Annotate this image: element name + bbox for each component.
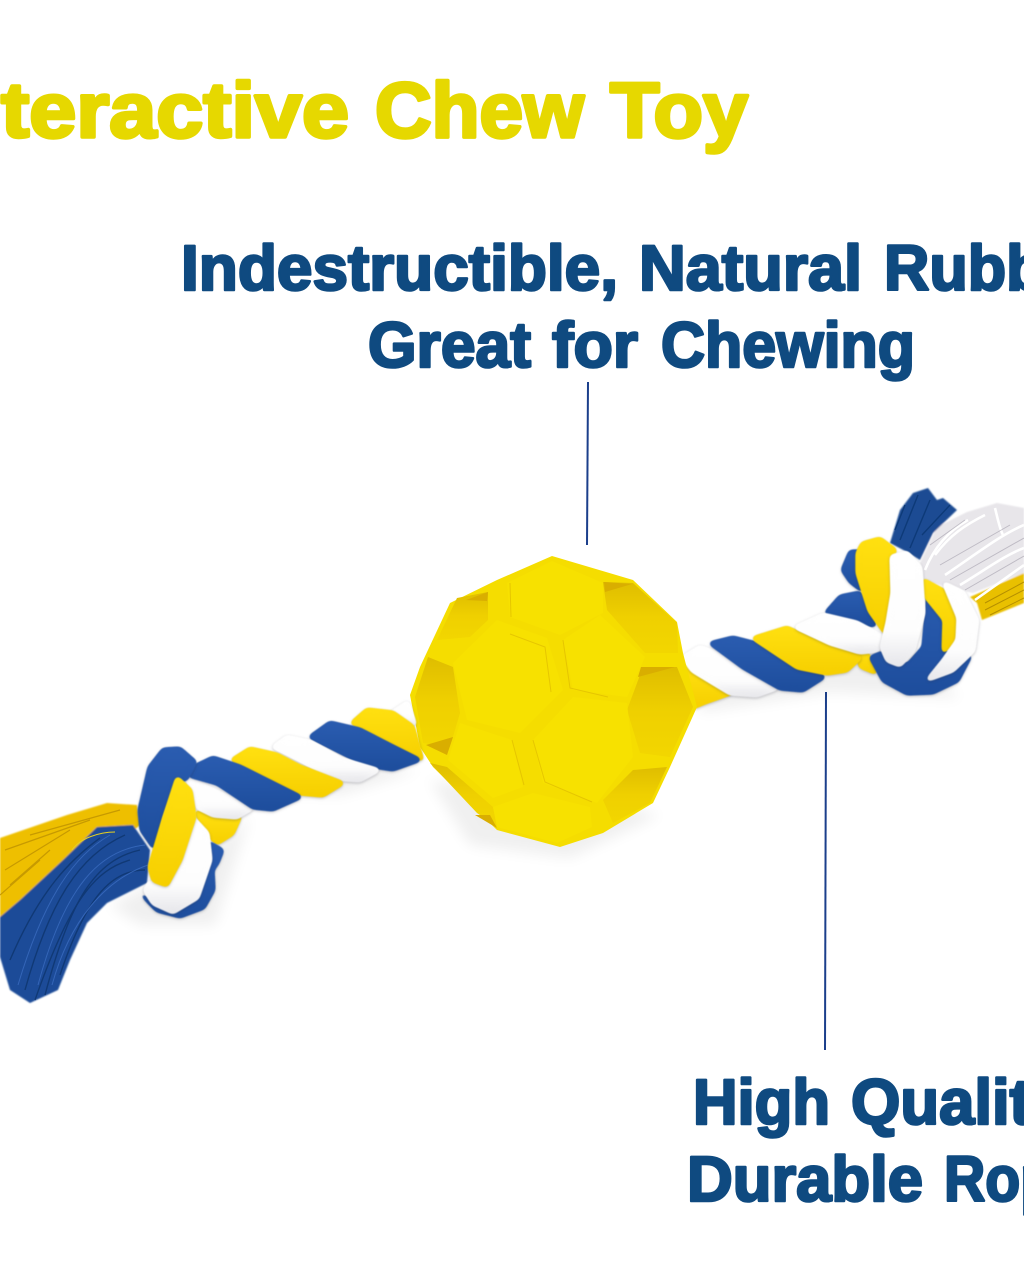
heading: rubber callout: Natural (639, 232, 862, 304)
heading: rubber callout: Indestructible, (181, 232, 618, 304)
product: rope and ball toy (0, 488, 1024, 1003)
rope left: twisted strands (186, 701, 423, 844)
leader line: rubber ball (587, 382, 588, 545)
heading: rope callout: Durable (687, 1143, 923, 1215)
ball body (410, 556, 697, 847)
title: Toy (610, 66, 748, 154)
rope right: twisted strands (682, 592, 885, 708)
rope right: knot (842, 538, 978, 694)
heading: rubber callout: Great (368, 309, 531, 381)
heading: rubber callout: for (552, 309, 638, 381)
heading: rubber callout (181, 232, 1024, 381)
rubber ball (410, 556, 697, 847)
rope left: knot (139, 748, 223, 917)
title: Chew (375, 66, 584, 154)
heading: rope callout: High (693, 1066, 830, 1138)
ball recessed cells (415, 582, 693, 827)
rope left: tassels (0, 803, 150, 1003)
heading: rubber callout: Chewing (661, 309, 915, 381)
heading: rope callout (687, 1066, 1024, 1215)
soft shadows (110, 640, 960, 925)
ball hexagon faces (448, 561, 645, 843)
leader line: rope (825, 692, 826, 1050)
title (0, 66, 748, 154)
rope right: tassels (890, 488, 1024, 620)
